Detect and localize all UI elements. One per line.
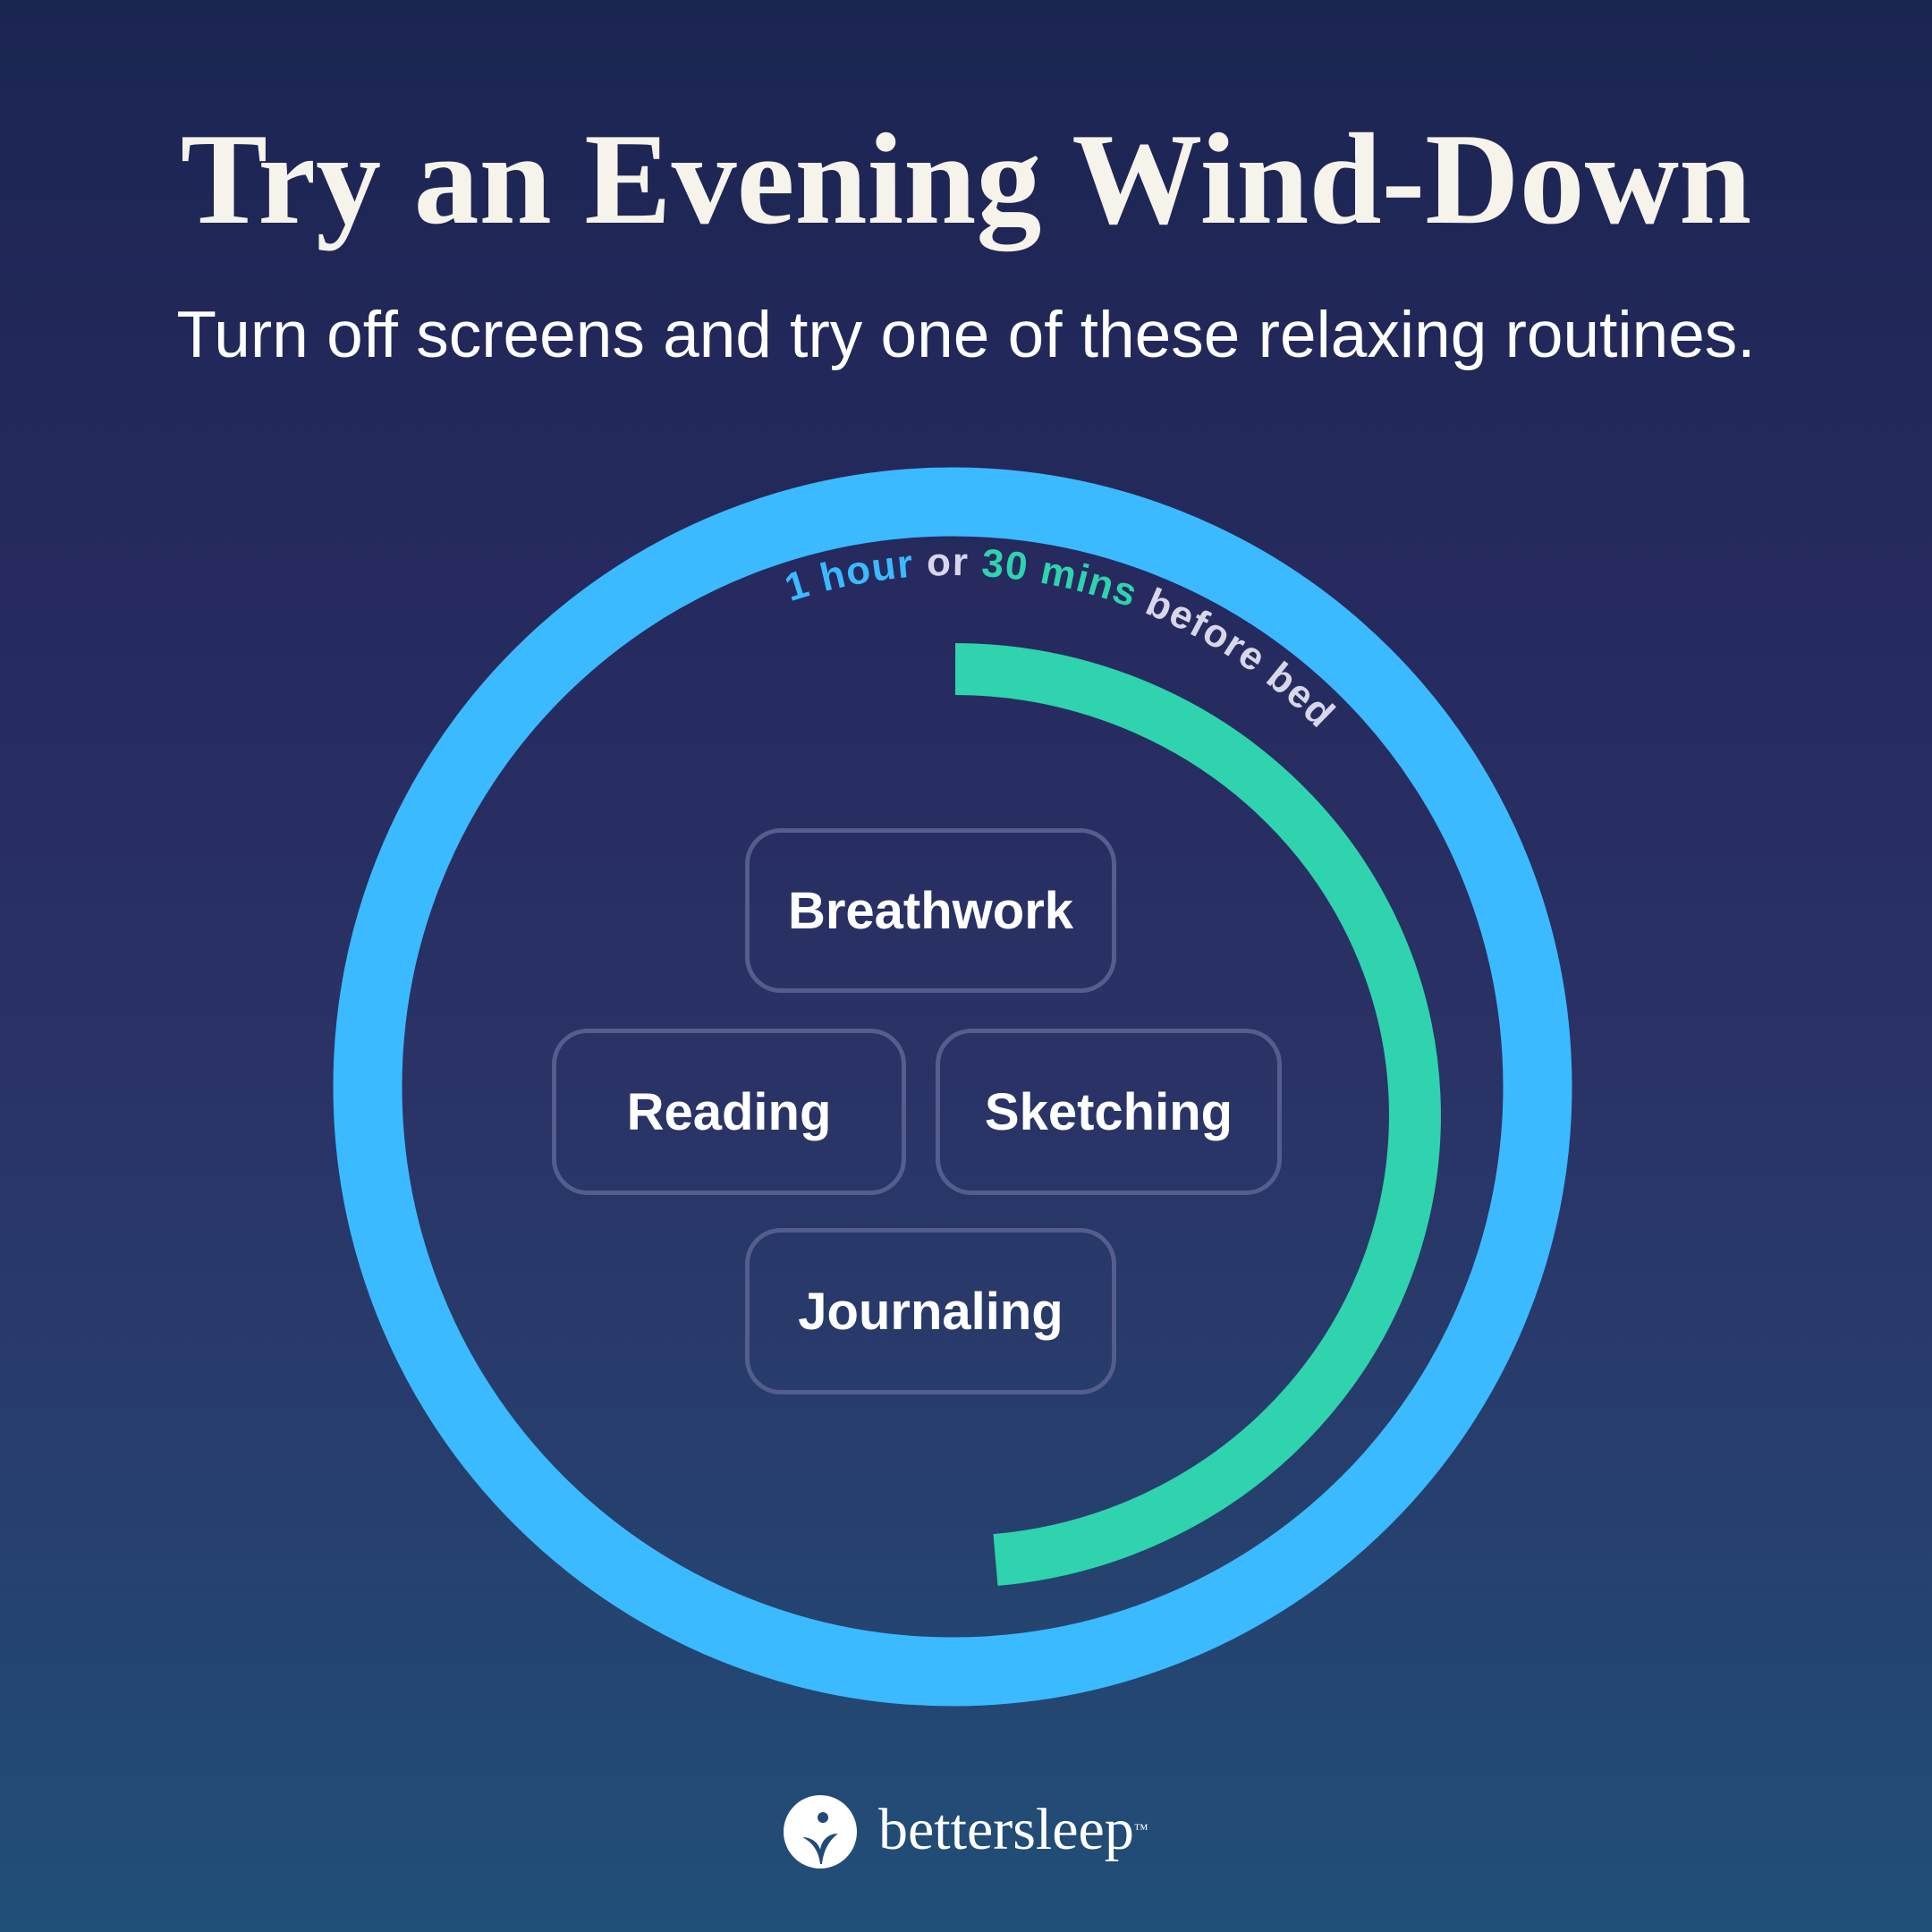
box: Journaling: Journaling <box>798 1283 1063 1340</box>
box: Breathwork: Breathwork <box>788 882 1073 939</box>
subtitle: Turn off screens and try one of these relaxing routines. <box>176 299 1756 371</box>
box: Reading: Reading <box>627 1082 831 1141</box>
box: Journaling <box>745 1228 1116 1394</box>
logo <box>784 1795 1148 1868</box>
box: Sketching <box>936 1029 1282 1195</box>
box: Reading <box>552 1029 906 1195</box>
box: Sketching: Sketching <box>985 1082 1233 1141</box>
inner arc: 30 mins <box>955 669 1415 1560</box>
icon: logo mark <box>784 1795 857 1868</box>
outer ring: 1 hour <box>368 502 1538 1672</box>
box: Breathwork <box>745 828 1116 993</box>
title: Try an Evening Wind-Down <box>181 106 1751 251</box>
arc label: 1 hour or 30 mins before bed <box>785 549 1336 728</box>
brand name: bettersleep™ <box>878 1797 1148 1862</box>
